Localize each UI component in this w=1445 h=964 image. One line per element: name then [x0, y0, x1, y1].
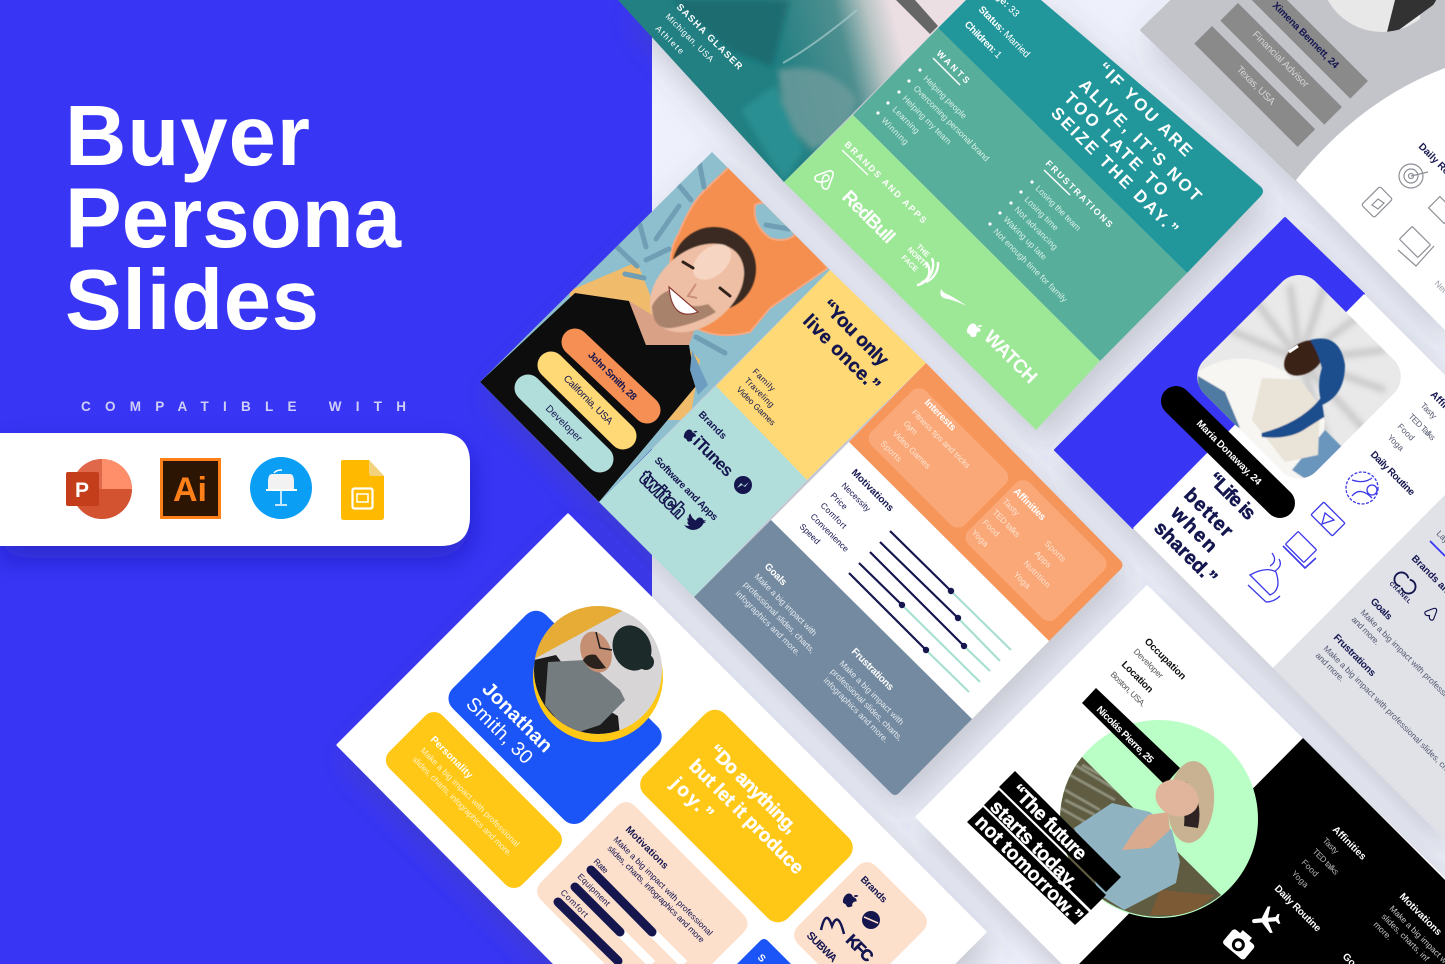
text: affinities [1386, 389, 1445, 453]
wants list: WANTS [935, 48, 973, 87]
text: name: SASHA GLASER [674, 2, 745, 73]
panel: quote: joy.” [666, 773, 717, 825]
quote: “IF YOU ARE [1094, 58, 1197, 162]
text: occupation and location [1109, 636, 1188, 709]
panel: quote: “Do anything, [704, 741, 801, 838]
panel: motivations: Motivations [623, 824, 671, 872]
panel: motivations: Convenience [809, 511, 851, 554]
panel: brands [794, 862, 927, 964]
bar: name: Ximena Bennett, 24 [1270, 0, 1341, 71]
panel: motivations: Necessity [840, 480, 873, 514]
text: motivations: Motivations [1397, 891, 1444, 938]
slide: John Smith [470, 140, 1122, 795]
frustrations list: Not advancing [1013, 204, 1060, 252]
panel: small blue card [737, 939, 791, 964]
quote: TOO LATE TO [1060, 88, 1173, 202]
brands heading: BRANDS AND APPS [843, 139, 930, 226]
sliders [849, 531, 1011, 692]
black panel [1079, 738, 1445, 964]
panel: quote: “You only [817, 296, 893, 371]
panel: affinities: Tasty [1001, 496, 1022, 518]
grey details panel [1273, 495, 1445, 840]
panel: goals and frustrations: professional slides, charts, [742, 579, 817, 655]
panel: affinities [961, 476, 1111, 625]
panel: name: Smith, 30 [461, 693, 537, 769]
bar: occupation: Financial Advisor [1250, 29, 1311, 91]
text: goals: and more. [1350, 614, 1382, 647]
slide: Nicolas Pierre [917, 587, 1445, 964]
text: demographics: Children: 1 [962, 19, 1004, 61]
icon: google slides [341, 460, 384, 520]
text: demographics: Status: Married [976, 4, 1032, 60]
panel: quote [716, 270, 926, 480]
panel: brands and software: twitch [636, 468, 690, 521]
icon: illustrator: Ai [173, 471, 207, 509]
text: occupation and location: Location [1119, 659, 1155, 695]
panel: brands and software: Brands [696, 409, 729, 442]
panel: orange interests [849, 363, 1122, 641]
frustrations list: Losing time [1023, 194, 1061, 233]
wants list: Learning [891, 104, 922, 136]
panel: motivations [537, 802, 748, 964]
bars: quote: starts today, [985, 796, 1082, 893]
panel: personality: slides, charts, infographics and more. [411, 754, 515, 858]
logo: red bull: RedBull [837, 187, 899, 248]
wants list [876, 48, 992, 163]
text: daily routine heading: Daily Routine [1368, 449, 1417, 498]
panel: affinities: Sports [1043, 538, 1068, 564]
circle: yellow accent [533, 612, 663, 742]
frustrations list [988, 158, 1116, 305]
pill: name [575, 342, 647, 410]
text: affinities: Yoga [1386, 432, 1406, 453]
bar: name: Nicolás Pierre, 25 [1094, 704, 1156, 766]
logo: north face: FACE [900, 253, 920, 274]
wants list: Winning [880, 115, 911, 147]
text: motivations [1372, 891, 1445, 964]
panel: interests: Gym [902, 418, 920, 437]
text: motivations: slides, charts, inf [1380, 911, 1432, 964]
panel: personality: Make a big impact with professional [419, 745, 522, 849]
bar: name [1082, 688, 1180, 785]
panel: affinities: TED talks [991, 507, 1022, 539]
panel: interests [865, 384, 1012, 532]
slide: Sasha Glaser teal [610, 0, 1263, 430]
wants list: Helping my team [901, 93, 954, 146]
pill: name: John Smith, 28 [585, 350, 639, 403]
quote: ALIVE, IT’S NOT [1075, 75, 1207, 207]
blue header [1055, 218, 1364, 528]
panel: affinities: Nutrition [1022, 558, 1053, 590]
blue background panel [0, 0, 652, 964]
logo: chanel [1388, 570, 1418, 605]
white body [1133, 294, 1445, 668]
panel: interests: Interests [922, 397, 958, 434]
panel: brands: Brands [858, 874, 889, 906]
text: affinities: Yoga [1290, 868, 1311, 890]
quote: when [1166, 501, 1222, 557]
icon: camera [1222, 925, 1258, 961]
text: frustrations: Frustrations [1331, 632, 1378, 679]
panel: quote: live once.” [798, 311, 884, 396]
icon: powerpoint: P [75, 479, 89, 502]
pill: location [551, 365, 623, 436]
panel: personality: Personality [428, 734, 475, 781]
panel: affinities: Food [981, 517, 1002, 539]
icon: airbnb [814, 166, 838, 190]
logo: nike [940, 289, 967, 306]
panel: goals and frustrations [694, 520, 972, 795]
icon: powerpoint [66, 459, 132, 519]
text: daily routine heading: Daily Routine [1272, 883, 1323, 935]
pill: occupation [528, 388, 600, 459]
bar: location [1194, 26, 1315, 147]
panel: affinities: Yoga [1012, 569, 1033, 591]
text: affinities: Food [1396, 421, 1417, 443]
frustrations list: Waking up late [1002, 214, 1049, 262]
panel: brands and software [599, 386, 807, 597]
panel: goals and frustrations: infographics and more. [734, 588, 803, 658]
slide: Jonathan Smith [338, 515, 985, 964]
photo: Maria [1197, 275, 1401, 478]
panel: quote: Traveling [743, 375, 777, 409]
icons: grey line icons [1361, 164, 1445, 266]
slide: Maria Donaway [1055, 218, 1445, 840]
white body [917, 587, 1445, 964]
panel: goals and frustrations: infographics and more. [822, 675, 891, 745]
white body [1296, 68, 1445, 330]
frustrations list: FRUSTRATIONS [1044, 158, 1116, 230]
text: motivations: more. [1372, 919, 1394, 942]
panel: motivations: Make a big impact with professional [612, 834, 715, 938]
text: layout label and line [1430, 528, 1445, 556]
panel: motivations: Speed [798, 521, 823, 546]
panel: affinities: Yoga [970, 527, 991, 549]
frustrations list: Not enough time for family [992, 226, 1070, 305]
logo: north face [900, 242, 938, 285]
panel: quote [634, 704, 859, 928]
quote [1047, 58, 1207, 240]
panel: affinities: Apps [1033, 548, 1054, 570]
bar: location: Texas, USA [1234, 64, 1277, 108]
photo: pillow [610, 0, 970, 190]
panel: goals and frustrations: professional slides, charts, [829, 666, 905, 743]
icon: illustrator [162, 460, 220, 518]
panel: motivations: Rate [592, 856, 611, 876]
panel: brands: SUBWA [804, 930, 839, 964]
wants list: Helping people [922, 73, 969, 121]
text: occupation and location: Occupation [1142, 636, 1188, 682]
panel: motivations [771, 442, 1049, 719]
bar: occupation [1220, 3, 1342, 125]
pill: occupation: Developer [543, 403, 584, 445]
panel: brands and software: iTunes [689, 432, 737, 480]
icon: airbnb outline [1424, 605, 1440, 621]
logo: north face: THE [915, 242, 932, 259]
frustrations list: Losing the team [1034, 183, 1083, 233]
panel: motivations: slides, charts, infographics and more [606, 843, 707, 945]
logo: apple watch: WATCH [979, 327, 1041, 388]
logo: chanel: CHANEL [1388, 581, 1412, 605]
panel: name [448, 606, 663, 824]
title: Persona [65, 171, 402, 266]
photo: leaves [1060, 757, 1221, 917]
slide: Ximena Bennett [1141, 0, 1445, 330]
subtitle: compatible with: COMPATIBLE WITH [81, 399, 406, 414]
panel: interests: Fitness tips and tricks [910, 407, 973, 470]
person: hat and shirt [1074, 759, 1217, 910]
photo: smiling man [470, 140, 840, 510]
panel: brands and software: Software and Apps [652, 455, 720, 524]
bar: name [1246, 0, 1368, 99]
pill: name: Maria Donaway, 24 [1194, 418, 1263, 488]
text: occupation and location: Developer [1132, 646, 1166, 680]
panel: personality [381, 707, 567, 893]
text: affinities: Food [1300, 857, 1321, 879]
bars: quote: “The future [1006, 780, 1091, 865]
icon: plane [1251, 906, 1281, 934]
panel: motivations: Motivations [849, 467, 896, 514]
bars: quote [967, 771, 1121, 928]
text: affinities [1290, 824, 1368, 890]
panel: interests: Video Games [891, 428, 933, 471]
card: software icons [0, 433, 470, 546]
panel: motivations: Price [829, 490, 850, 512]
quote: shared.” [1149, 517, 1222, 589]
panel: goals and frustrations: Make a big impact with [838, 658, 906, 727]
white body [338, 515, 985, 964]
grey header [1141, 0, 1445, 180]
photo: Jonathan [534, 606, 662, 734]
panel: goals and frustrations: Goals [762, 561, 789, 589]
panel: goals and frustrations: Make a big impact with [753, 571, 819, 638]
panel: motivations: Comfort [819, 500, 849, 531]
panel: quote: Video Games [735, 384, 778, 427]
panel: interests: Sports [879, 438, 904, 464]
text: affinities: Affinities [1330, 824, 1368, 863]
quote: “Life is [1203, 468, 1260, 525]
panel: motivations: Equipment [576, 871, 613, 909]
text: occupation and location: Boston, USA. [1109, 669, 1148, 709]
text: affinities: TED Talks [1407, 411, 1438, 442]
text: affinities: Tasty [1419, 400, 1440, 421]
circle: mint background [1060, 720, 1258, 918]
panel: goals and frustrations: Frustrations [849, 646, 896, 693]
quote: better [1179, 484, 1238, 542]
title [65, 89, 402, 348]
wants list: Overcoming personal brand [912, 83, 992, 163]
panel: motivations: Comfort [559, 887, 591, 920]
panel: quote: Family [751, 366, 778, 394]
text: name: Jonathan [477, 678, 557, 757]
title: Buyer [65, 89, 310, 184]
quote [1149, 468, 1260, 589]
quote: SEIZE THE DAY.” [1047, 103, 1184, 240]
title: Slides [65, 253, 319, 348]
text: name: Athlete [654, 23, 686, 56]
bars [558, 870, 684, 964]
panel: quote: but let it produce [684, 756, 808, 879]
text: goals: Goals [1368, 596, 1394, 623]
panel: brands and apps [784, 115, 1100, 430]
pill: location: California, USA [561, 373, 615, 427]
text: affinities: Tasty [1321, 835, 1342, 856]
logo: north face: NORTH [906, 245, 931, 270]
panel: wants and frustrations [853, 28, 1187, 361]
icons: routine line icons [1248, 472, 1378, 602]
pill: name [1176, 401, 1280, 503]
panel: affinities: Affinities [1011, 486, 1048, 523]
bars: quote: not tomorrow.” [970, 811, 1087, 928]
text: frustrations: and more. [1314, 650, 1347, 684]
portrait [1328, 0, 1436, 32]
icon: keynote [250, 457, 312, 519]
text: name: Michigan, USA [664, 11, 716, 64]
text: affinities: TED talks [1311, 846, 1341, 877]
panel: quote [938, 0, 1263, 273]
